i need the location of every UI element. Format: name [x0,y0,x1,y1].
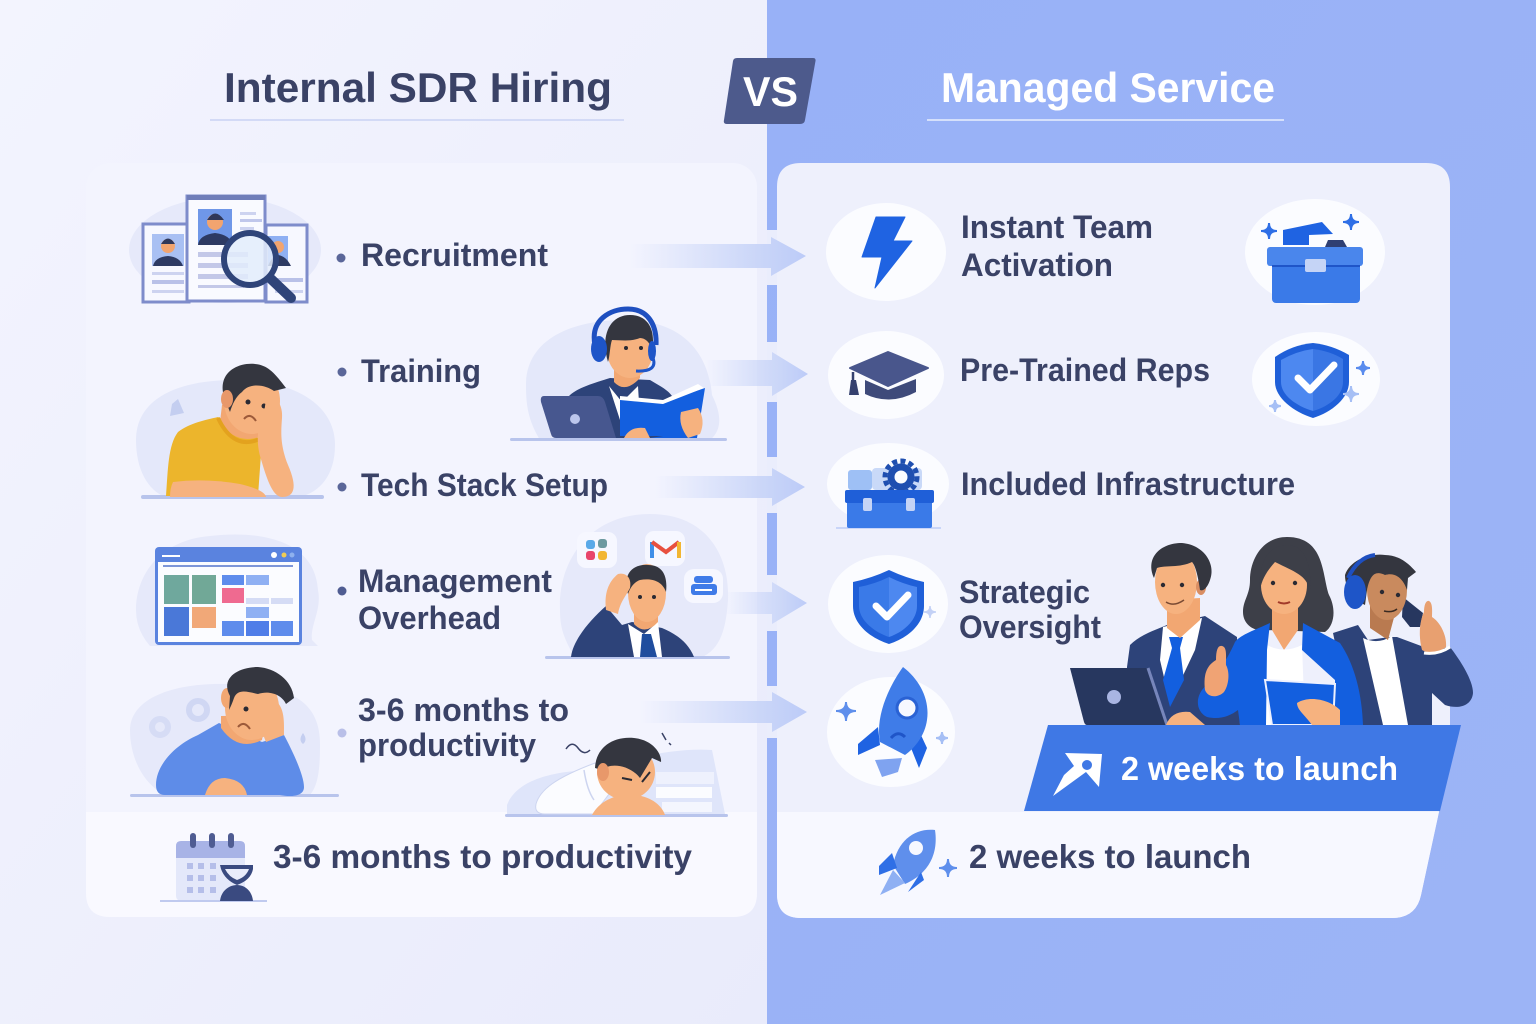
illustration: task board [136,534,319,646]
banner: 2 weeks to launch [1024,725,1461,811]
footer text: months to productivity: 3-6 months to productivity [273,838,693,875]
illustration: team of three [1070,537,1473,725]
bullet: productivity [338,728,346,738]
label: management overhead: Management [358,563,552,599]
label: months to productivity: 3-6 months to [358,692,569,728]
bullet: training [338,368,346,376]
divider gaps behind arrows [767,230,777,738]
illustration: man in yellow shirt [136,364,335,499]
left background [0,0,768,1024]
label: management overhead [358,563,552,636]
panel: managed service [777,163,1450,918]
person: man in suit with laptop [1070,543,1240,725]
icon: resumes and magnifier [129,195,321,303]
illustration: stressed man in blue sweater [130,667,339,797]
label: management overhead: Overhead [358,600,501,636]
label: recruitment: Recruitment [361,237,548,273]
arrow: recruitment [630,237,806,276]
illustration: distracted manager with app icons [545,514,730,659]
icon: banner rocket [1053,753,1102,796]
VS badge [724,58,816,124]
arrow: training [705,352,808,396]
label: months to productivity: productivity [358,727,536,763]
arrow: tech stack [655,468,805,506]
banner: 2 weeks to launch: 2 weeks to launch [1121,750,1398,787]
label: instant team activation: Activation [961,247,1113,283]
bullet: tech stack [338,482,346,492]
illustration: agent with headset and book [510,309,727,441]
label: instant team activation [961,209,1153,283]
icon: calendar and hourglass [160,833,267,902]
icon: shield check badge [1252,332,1380,426]
icon: infrastructure toolbox [827,443,949,529]
icon: graduation cap [828,331,944,419]
person: man with headset and phone [1333,555,1473,725]
icon: small rocket [879,830,957,895]
label: strategic oversight: Strategic [959,574,1090,610]
label: tech stack setup: Tech Stack Setup [361,467,608,503]
footer text: 2 weeks to launch: 2 weeks to launch [969,838,1251,875]
bullet: recruitment [336,254,346,262]
arrow: productivity [640,692,807,732]
right background [767,0,1536,1024]
VS badge: VS [743,68,798,115]
label: training: Training [361,353,481,389]
icon: toolbox [1245,199,1385,305]
title: Managed Service: Managed Service [941,64,1275,111]
bullet: management [338,586,346,596]
icon: lightning bolt [826,203,946,301]
arrow: management [725,582,807,624]
label: pre-trained reps: Pre-Trained Reps [960,352,1210,388]
illustration: man asleep on books [505,733,728,817]
label: strategic oversight: Oversight [959,609,1101,645]
panel: internal hiring [86,163,757,917]
title: Internal SDR Hiring: Internal SDR Hiring [224,64,612,111]
label: months to productivity [358,692,569,763]
icon: rocket [827,667,955,787]
label: instant team activation: Instant Team [961,209,1153,245]
label: strategic oversight [959,574,1101,645]
person: woman in blue blazer [1198,537,1363,725]
icon: oversight shield [828,555,948,653]
label: included infrastructure: Included Infrastructure [961,466,1295,502]
